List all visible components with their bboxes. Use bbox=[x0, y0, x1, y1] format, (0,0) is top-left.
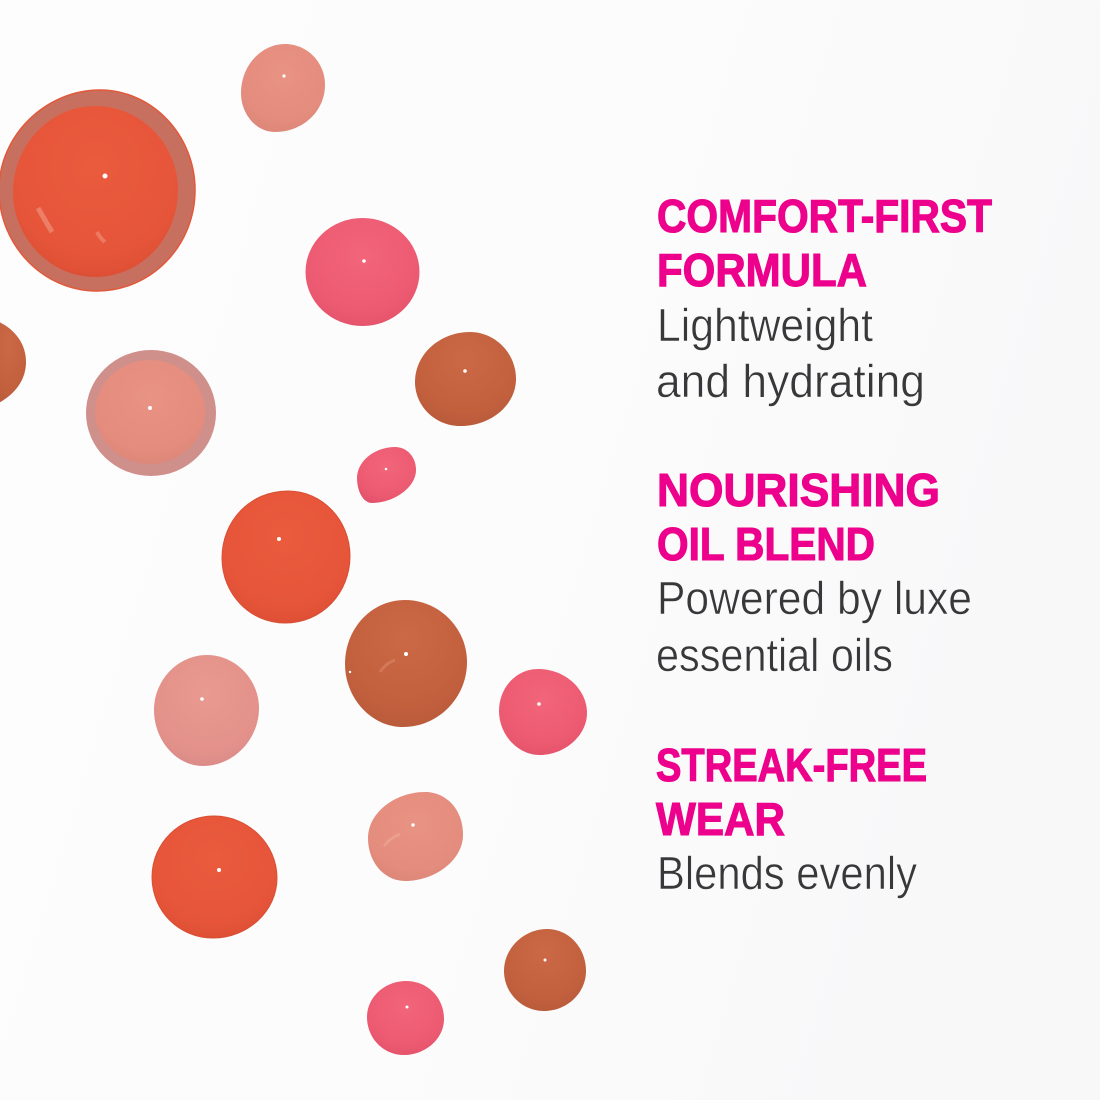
droplet: pink bbox=[306, 218, 420, 326]
swatches: lip oil droplets bbox=[0, 44, 587, 1055]
droplet: small nude top bbox=[241, 44, 325, 132]
description: and hydrating bbox=[656, 355, 925, 407]
heading bbox=[656, 739, 927, 845]
description: Blends evenly bbox=[657, 847, 917, 899]
heading: OIL BLEND bbox=[657, 518, 875, 570]
droplet: rose lower bbox=[154, 655, 259, 766]
description bbox=[656, 572, 972, 681]
droplet: nude lower bbox=[368, 792, 463, 881]
droplet: brown lower bbox=[504, 929, 586, 1011]
description: Powered by luxe bbox=[657, 572, 972, 624]
heading bbox=[657, 190, 992, 296]
droplet: small pink bbox=[357, 447, 416, 503]
heading: COMFORT-FIRST bbox=[657, 190, 992, 242]
droplet: brown cropped at left edge bbox=[0, 319, 26, 406]
benefit: comfort-first formula bbox=[656, 190, 992, 407]
benefit: streak-free wear bbox=[656, 739, 927, 899]
heading: FORMULA bbox=[657, 244, 867, 296]
droplet: brown upper bbox=[415, 332, 516, 426]
description: essential oils bbox=[656, 629, 893, 681]
heading: STREAK-FREE bbox=[656, 739, 927, 791]
description: Lightweight bbox=[657, 299, 873, 351]
description bbox=[656, 299, 925, 407]
droplet: brown centre bbox=[345, 600, 467, 727]
droplet: coral lower bbox=[152, 816, 277, 938]
droplet: rose ringed bbox=[86, 350, 216, 476]
heading bbox=[657, 464, 940, 570]
droplet: large coral bbox=[0, 90, 195, 291]
heading: WEAR bbox=[656, 793, 785, 845]
droplet: pink bottom bbox=[367, 981, 444, 1055]
droplet: pink right bbox=[499, 669, 587, 755]
droplet: coral centre bbox=[222, 491, 350, 623]
heading: NOURISHING bbox=[657, 464, 940, 516]
benefit: nourishing oil blend bbox=[656, 464, 972, 681]
